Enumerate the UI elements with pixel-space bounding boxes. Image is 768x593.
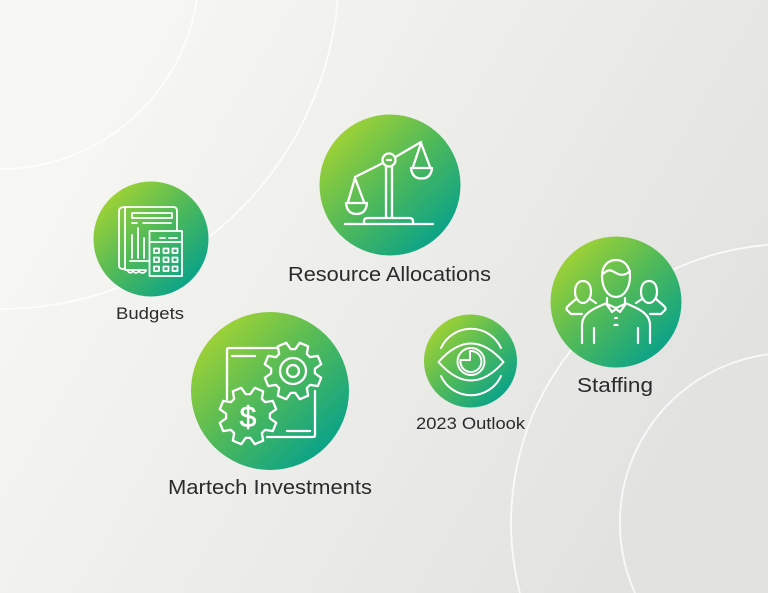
item: Martech Investments xyxy=(168,312,372,499)
item: Staffing xyxy=(550,236,682,397)
label: Budgets: Budgets xyxy=(116,305,184,323)
gear: upper xyxy=(265,343,321,399)
label: Martech Investments: Martech Investments xyxy=(168,476,372,499)
gear: lower with dollar xyxy=(220,388,276,444)
item: Resource Allocations xyxy=(288,114,491,286)
label: Staffing: Staffing xyxy=(577,374,653,397)
circle: 2023 Outlook xyxy=(424,314,517,408)
icon: receipt and calculator xyxy=(119,207,182,276)
circle: Resource Allocations xyxy=(320,114,460,256)
icon: team of people xyxy=(566,260,666,343)
circle: Staffing xyxy=(550,236,682,368)
icon: gears and dollar xyxy=(220,343,321,444)
item: Budgets xyxy=(94,182,208,323)
icon: balance scale xyxy=(345,142,433,224)
circle: Budgets xyxy=(94,182,208,296)
label: Resource Allocations: Resource Allocations xyxy=(288,263,491,286)
icon: dollar sign: $ xyxy=(240,401,257,434)
item: 2023 Outlook xyxy=(416,314,526,433)
circle: Martech Investments xyxy=(191,312,349,470)
icon: eye xyxy=(438,329,504,395)
label: 2023 Outlook: 2023 Outlook xyxy=(416,415,526,433)
